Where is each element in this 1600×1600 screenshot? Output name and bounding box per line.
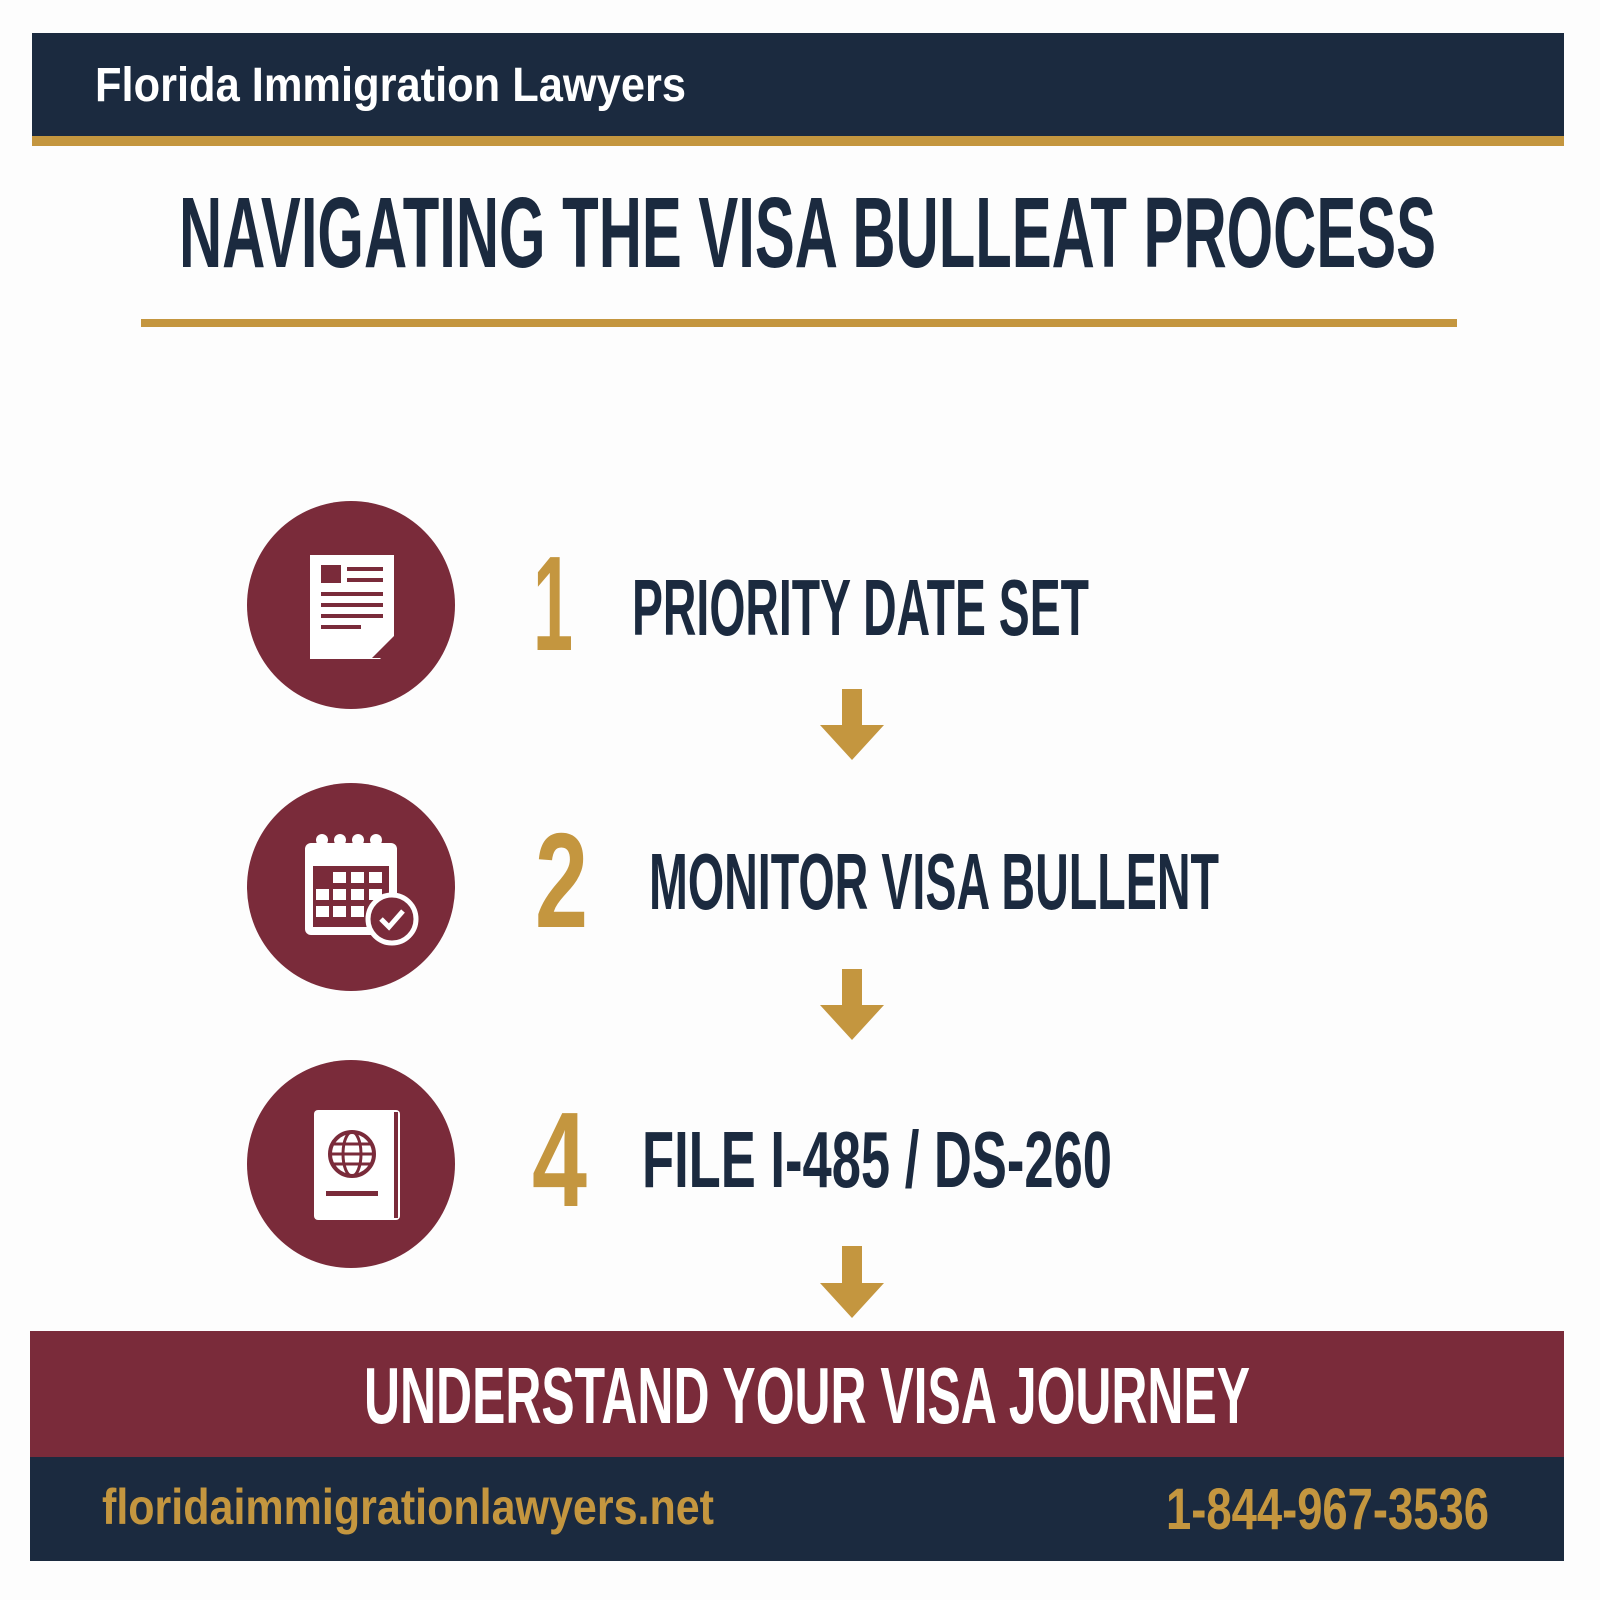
arrow 2 <box>820 969 884 1040</box>
icon: passport <box>247 1060 455 1268</box>
step 2 <box>247 783 1219 991</box>
arrow 3 <box>820 1246 884 1318</box>
header brand text: Florida Immigration Lawyers <box>95 59 686 112</box>
title underline <box>141 319 1457 327</box>
step 3 label: FILE I-485 / DS-260 <box>642 1115 1112 1204</box>
step 2 label: MONITOR VISA BULLENT <box>649 837 1219 926</box>
footer website: floridaimmigrationlawyers.net <box>102 1479 714 1535</box>
step 1 <box>247 501 1089 709</box>
step 1 label: PRIORITY DATE SET <box>632 563 1089 652</box>
banner: call to action <box>30 1331 1564 1458</box>
number 2: 2 <box>535 805 588 956</box>
number 4: 4 <box>532 1084 587 1235</box>
icon: calendar <box>247 783 455 991</box>
footer bar <box>30 1457 1564 1561</box>
arrow 1 <box>820 689 884 760</box>
number 1: 1 <box>533 528 573 679</box>
header bar <box>32 33 1564 146</box>
step 3 <box>247 1060 1112 1268</box>
icon: document <box>247 501 455 709</box>
footer phone: 1-844-967-3536 <box>1166 1477 1489 1542</box>
